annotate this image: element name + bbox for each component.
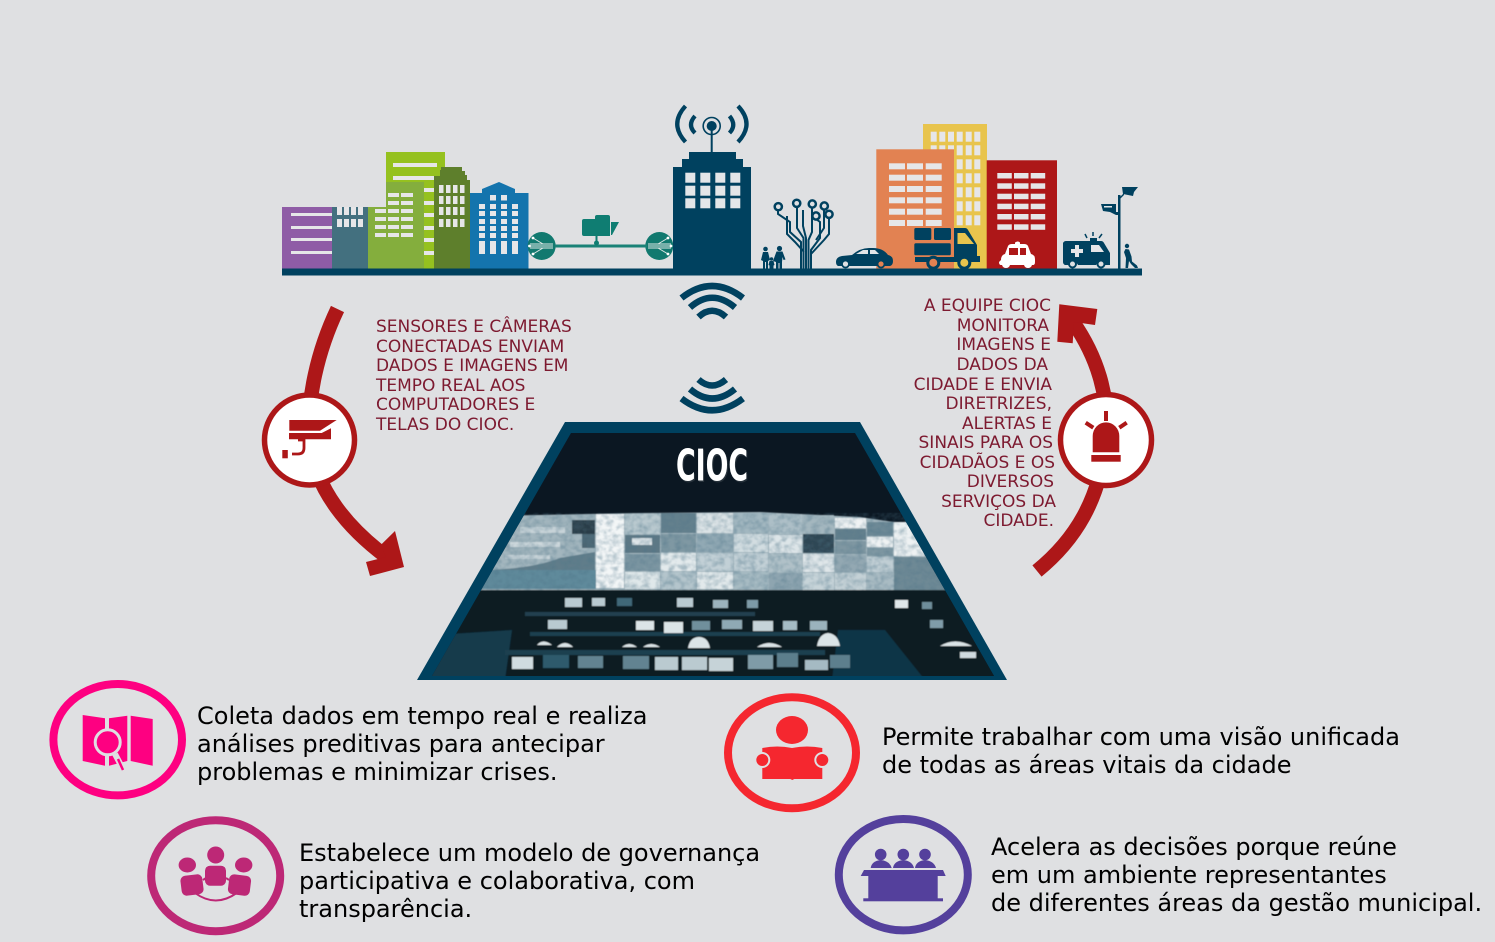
text: team (914, 296, 1056, 531)
text: faster decisions: em um ambiente representantes (991, 861, 1387, 889)
title: CIOC: CIOC (677, 442, 749, 493)
building: light green (368, 182, 424, 269)
video wall (470, 512, 960, 590)
icon: car (836, 248, 893, 268)
text: collects data: análises preditivas para antecipar (197, 730, 605, 758)
text: unified view: Permite trabalhar com uma visão unificada (882, 723, 1400, 751)
icon: camera pole and pedestrian (1101, 187, 1138, 269)
text: team: MONITORA (957, 316, 1049, 336)
circle icon: map with magnifier (53, 684, 182, 795)
building: blue (470, 182, 528, 269)
text: team: A EQUIPE CIOC (924, 296, 1051, 316)
text: sensors: DADOS E IMAGENS EM (376, 356, 568, 376)
text: sensors: SENSORES E CÂMERAS (376, 315, 572, 337)
text: team: IMAGENS E (956, 335, 1051, 355)
text: sensors: TEMPO REAL AOS (375, 376, 525, 396)
text: team: CIDADE. (983, 511, 1054, 531)
building: purple (282, 207, 332, 269)
circle icon: meeting panel (839, 819, 968, 930)
building: slate (332, 207, 368, 269)
text: team: DIRETRIZES, (946, 394, 1052, 414)
text: unified view (882, 723, 1400, 779)
text: team: CIDADÃOS E OS (920, 451, 1055, 473)
text: team: ALERTAS E (962, 414, 1052, 434)
circle icon: security camera (264, 395, 354, 485)
icon: wifi up (682, 380, 743, 410)
circle icon: alarm (1060, 394, 1152, 486)
text: faster decisions: de diferentes áreas da gestão municipal. (991, 889, 1482, 917)
text: unified view: de todas as áreas vitais da cidade (882, 751, 1291, 779)
text: sensors (375, 315, 572, 435)
text: collects data (197, 702, 647, 786)
icon: family silhouettes (761, 246, 786, 269)
central tower with antenna (673, 106, 751, 269)
city skyline (282, 106, 1142, 276)
building: lime (386, 152, 445, 269)
text: team: DIVERSOS (967, 472, 1054, 492)
building: orange (876, 149, 954, 269)
icon: circuit tree (775, 200, 833, 269)
text: faster decisions: Acelera as decisões porque reúne (991, 833, 1397, 861)
text: team: CIDADE E ENVIA (914, 375, 1052, 395)
arrow: CIOC to city (1037, 304, 1107, 571)
arrow: city to CIOC (309, 309, 404, 576)
title: CIOC (676, 440, 749, 493)
ground line (282, 268, 1142, 276)
building: red (987, 160, 1057, 269)
icon: wifi down (682, 286, 743, 317)
title: CIOC: CIOC (676, 440, 748, 492)
text: faster decisions (991, 833, 1482, 917)
circle icon: collaborative group (151, 820, 280, 931)
building: dark green (434, 167, 470, 269)
text: governance (299, 839, 760, 923)
text: collects data: problemas e minimizar crises. (197, 758, 557, 786)
icon: ambulance (1063, 232, 1110, 268)
panel: CIOC control room (417, 422, 1007, 680)
text: team: DADOS DA (956, 355, 1048, 375)
circle icon: reader (728, 697, 856, 808)
control desks (505, 598, 976, 671)
text: governance: Estabelece um modelo de governança (299, 839, 760, 867)
icon: truck (914, 228, 980, 268)
text: collects data: Coleta dados em tempo real e realiza (197, 702, 647, 730)
text: sensors: TELAS DO CIOC. (375, 415, 514, 435)
text: governance: transparência. (299, 895, 472, 923)
icon: police car (999, 242, 1035, 268)
text: sensors: CONECTADAS ENVIAM (376, 337, 564, 357)
text: sensors: COMPUTADORES E (376, 395, 535, 415)
building: yellow (923, 124, 987, 269)
icon: data network with folder (528, 215, 673, 260)
text: governance: participativa e colaborativa, com (299, 867, 695, 895)
text: team: SINAIS PARA OS (919, 433, 1053, 453)
text: team: SERVIÇOS DA (941, 492, 1056, 512)
